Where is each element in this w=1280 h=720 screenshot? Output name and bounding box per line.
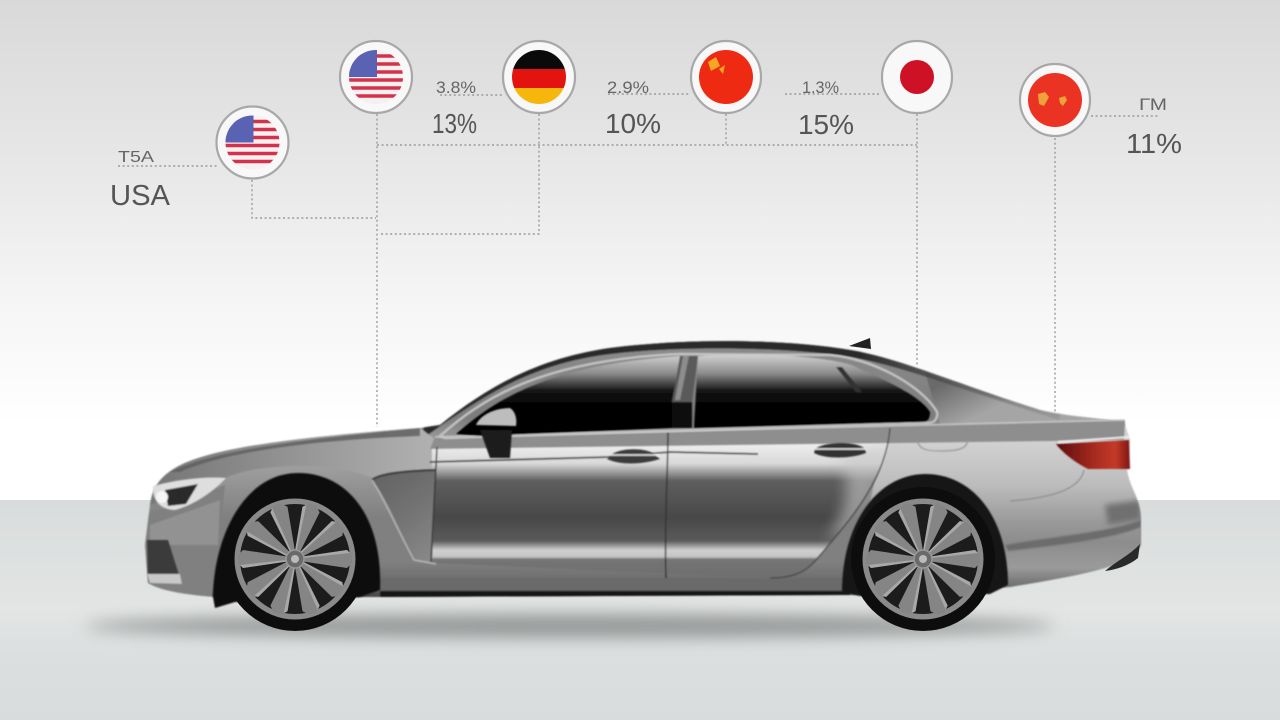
- flag: USA lower: [216, 106, 288, 178]
- rear crease: [1010, 470, 1084, 501]
- flag: China: [691, 41, 761, 113]
- exhaust: [1105, 544, 1140, 571]
- label: second country: 13%: [432, 108, 477, 139]
- rear door right light patch: [825, 444, 887, 541]
- headlight: [153, 477, 226, 510]
- front wheel: [223, 487, 367, 631]
- label: third country: 2.9%: [607, 78, 649, 97]
- label: third country: [605, 78, 661, 139]
- label: third country: 10%: [605, 108, 661, 139]
- mirror: [476, 408, 516, 458]
- roof dark edge: [425, 344, 1060, 432]
- label: second country: [432, 78, 477, 139]
- character line: [430, 452, 758, 462]
- flag: China right: [1020, 64, 1090, 136]
- C pillar trim: [836, 367, 862, 392]
- label: USA: T5A: [118, 149, 154, 166]
- fuel door: [917, 440, 968, 451]
- B pillar: [672, 356, 698, 402]
- sill: [381, 588, 842, 590]
- car ground shadow: [85, 614, 1055, 638]
- door panels: [372, 420, 1125, 578]
- flag: USA upper: [340, 41, 412, 113]
- label: fifth country: ГМ: [1139, 95, 1167, 114]
- car body: [145, 341, 1141, 600]
- label: fourth country: [798, 78, 854, 140]
- tail light: [1056, 437, 1130, 469]
- lower grille: [147, 540, 182, 584]
- rear wheel: [851, 487, 995, 631]
- flag: Germany: [503, 41, 575, 113]
- label: fifth country: [1126, 95, 1182, 159]
- windows: [440, 354, 937, 438]
- antenna: [849, 338, 871, 349]
- fender scoop: [372, 470, 436, 563]
- label: USA: USA: [110, 180, 171, 212]
- door handles: [607, 443, 866, 464]
- label: fourth country: 1.3%: [802, 78, 839, 97]
- label: fifth country: 11%: [1126, 128, 1182, 159]
- rear wheel arch: [842, 474, 1008, 596]
- background wall: [0, 0, 1280, 500]
- hood shading: [150, 428, 436, 505]
- connector lines: [118, 94, 1160, 427]
- door seams: [431, 432, 668, 578]
- rear bumper crease: [1005, 520, 1141, 551]
- label: USA: [110, 149, 171, 212]
- front wheel arch: [213, 473, 380, 608]
- shoulder strip: [430, 420, 1125, 449]
- rear deck: [926, 374, 1106, 424]
- floor: [0, 500, 1280, 720]
- flag: Japan: [882, 41, 952, 113]
- label: second country: 3.8%: [436, 78, 476, 97]
- car: [145, 338, 1141, 631]
- front bumper: [145, 485, 225, 600]
- label: fourth country: 15%: [798, 109, 854, 140]
- rear quarter: [870, 425, 1140, 586]
